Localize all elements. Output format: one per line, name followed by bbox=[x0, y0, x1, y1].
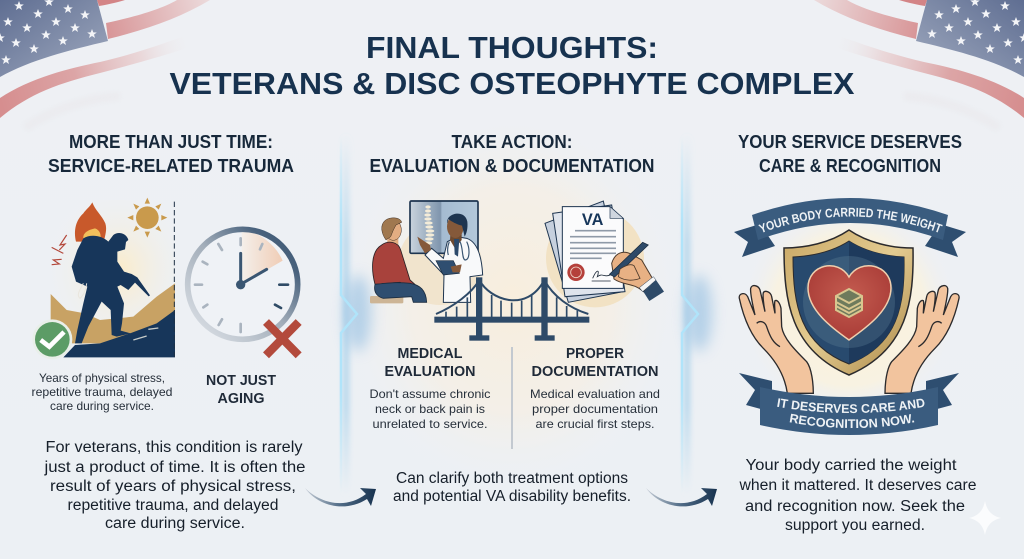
text block: center body: Can clarify both treatment options bbox=[396, 470, 628, 487]
icon: patient and doctor with spine x-ray bbox=[370, 201, 483, 305]
divider: left chevron bbox=[341, 135, 371, 495]
column: proper documentation: proper documentation bbox=[532, 402, 658, 416]
text block: right body: support you earned. bbox=[785, 517, 925, 534]
flag: top right bbox=[809, 0, 1024, 128]
banner: your body carried the weight bbox=[734, 198, 966, 257]
column: proper documentation: Medical evaluation and bbox=[530, 387, 660, 401]
heading: service-related trauma: MORE THAN JUST TIME: bbox=[69, 132, 273, 152]
banner: your body carried the weight: YOUR BODY CARRIED THE WEIGHT bbox=[758, 208, 943, 232]
column: proper documentation: PROPER bbox=[566, 346, 624, 362]
heading: service-related trauma bbox=[48, 132, 294, 176]
text block: center body: and potential VA disability benefits. bbox=[393, 488, 631, 505]
icon: check badge bbox=[32, 319, 72, 359]
panel: evaluation and documentation bbox=[370, 132, 664, 505]
column: medical evaluation: MEDICAL bbox=[398, 346, 463, 362]
caption: physical stress: Years of physical stress, bbox=[39, 371, 165, 385]
divider: right chevron bbox=[682, 135, 712, 495]
title: VETERANS & DISC OSTEOPHYTE COMPLEX bbox=[170, 66, 855, 101]
icon: hands bbox=[739, 286, 959, 393]
heading: care and recognition: CARE & RECOGNITION bbox=[759, 156, 941, 176]
arrow: left to center bbox=[305, 488, 376, 506]
column: medical evaluation: Don't assume chronic bbox=[370, 387, 490, 401]
title bbox=[170, 30, 855, 101]
label: not just aging bbox=[206, 373, 276, 407]
column: proper documentation: are crucial first steps. bbox=[536, 417, 654, 431]
heading: service-related trauma: SERVICE-RELATED TRAUMA bbox=[48, 156, 294, 176]
icon: clock with x bbox=[188, 229, 299, 355]
text block: right body: Your body carried the weight bbox=[746, 457, 957, 474]
panel: care and recognition bbox=[734, 132, 976, 534]
column: medical evaluation: unrelated to service. bbox=[372, 417, 488, 431]
text block: left body: just a product of time. It is often the bbox=[43, 459, 306, 476]
heading: evaluation and documentation: TAKE ACTION: bbox=[452, 132, 572, 152]
text block: right body bbox=[738, 457, 976, 534]
label: not just aging: AGING bbox=[218, 391, 264, 407]
text block: center body bbox=[393, 470, 631, 505]
text block: left body: care during service. bbox=[105, 515, 245, 532]
banner: it deserves care and recognition now bbox=[739, 373, 959, 435]
heading: care and recognition: YOUR SERVICE DESERVES bbox=[738, 132, 962, 152]
text block: right body: and recognition now. Seek the bbox=[745, 498, 965, 515]
arrow: center to right bbox=[646, 488, 717, 506]
column: medical evaluation bbox=[370, 346, 490, 431]
banner: it deserves care and recognition now: IT DESERVES CARE AND bbox=[777, 398, 924, 414]
column: proper documentation: DOCUMENTATION bbox=[532, 364, 658, 380]
panel: service-related trauma bbox=[32, 132, 306, 532]
column: medical evaluation: EVALUATION bbox=[384, 364, 476, 380]
emblem glow bbox=[741, 202, 957, 418]
text block: left body: result of years of physical stress, bbox=[50, 478, 296, 495]
icon: shield with heart bbox=[784, 230, 913, 375]
icon: suspension bridge bbox=[434, 277, 589, 341]
icon: soldier under load bbox=[32, 198, 175, 359]
title: FINAL THOUGHTS: bbox=[366, 30, 658, 65]
heading: evaluation and documentation: EVALUATION & DOCUMENTATION bbox=[370, 156, 654, 176]
caption: physical stress bbox=[32, 371, 172, 413]
text block: left body: For veterans, this condition is rarely bbox=[46, 439, 303, 456]
heading: evaluation and documentation bbox=[370, 132, 654, 176]
icon: VA paperwork and signing hand: VA bbox=[582, 211, 604, 229]
center panel warm glow bbox=[342, 110, 682, 490]
column: proper documentation bbox=[530, 346, 660, 431]
caption: physical stress: repetitive trauma, delayed bbox=[32, 385, 172, 399]
heading: care and recognition bbox=[738, 132, 962, 176]
flag: top left bbox=[0, 0, 215, 128]
text block: left body bbox=[43, 439, 306, 532]
label: not just aging: NOT JUST bbox=[206, 373, 276, 389]
icon: sparkle bbox=[969, 501, 1001, 535]
caption: physical stress: care during service. bbox=[50, 399, 154, 413]
icon: chevron rank badge bbox=[836, 289, 862, 317]
text block: left body: repetitive trauma, and delayed bbox=[68, 497, 278, 514]
text block: right body: when it mattered. It deserves care bbox=[738, 477, 976, 494]
banner: it deserves care and recognition now: RECOGNITION NOW. bbox=[790, 414, 914, 428]
column: medical evaluation: neck or back pain is bbox=[375, 402, 485, 416]
icon: VA paperwork and signing hand bbox=[545, 201, 664, 307]
